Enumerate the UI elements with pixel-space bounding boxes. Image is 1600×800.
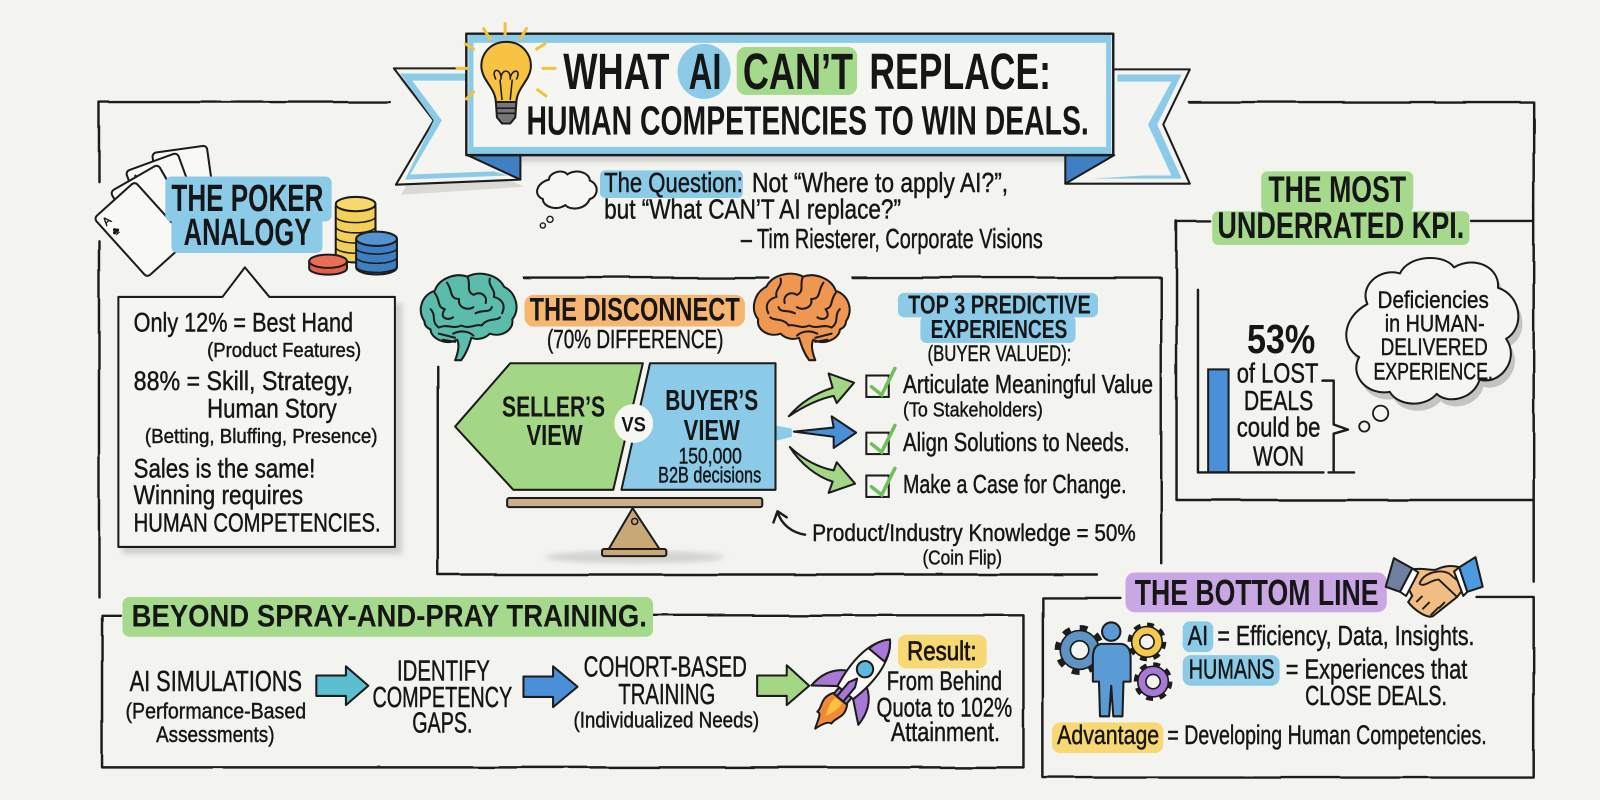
checklist item 1: (To Stakeholders) <box>903 399 1043 421</box>
step: ai simulations <box>126 666 306 747</box>
thought cloud: deficiencies: Deficiencies <box>1378 287 1489 314</box>
line: humans = experiences: HUMANS <box>1189 654 1274 685</box>
banner shadow <box>471 155 1114 161</box>
outer frame lines <box>99 102 1534 597</box>
callout box: poker stats: 88% = Skill, Strategy, <box>134 366 353 396</box>
arrow: green <box>757 665 809 705</box>
title text: CAN’T <box>743 43 853 100</box>
heading: top 3 predictive experiences: (BUYER VALUED): <box>928 341 1071 366</box>
callout box: poker stats: (Betting, Bluffing, Presence) <box>145 426 378 448</box>
arrow: green down <box>790 447 855 493</box>
icon: poker chips <box>309 197 397 275</box>
callout box: poker stats: Human Story <box>207 393 337 423</box>
line: humans = experiences: CLOSE DEALS. <box>1305 680 1447 711</box>
buyer's view panel: B2B decisions <box>658 463 761 488</box>
banner right tail <box>1065 69 1190 184</box>
stat: 53% of lost deals: WON <box>1253 440 1304 471</box>
brace <box>1322 381 1348 472</box>
banner main <box>466 34 1113 155</box>
icon: playing cards <box>94 145 218 278</box>
buyer's view panel: BUYER’S <box>665 385 758 417</box>
title text <box>527 43 1089 144</box>
result <box>877 635 1012 747</box>
icon: playing cards: A <box>131 172 143 186</box>
seller's view arrow: SELLER’S <box>502 391 605 423</box>
icon: playing cards: ♠ <box>159 170 166 183</box>
icon: playing cards: ♦ <box>136 185 145 199</box>
line: ai = efficiency: = Efficiency, Data, Insights. <box>1217 620 1474 651</box>
heading: the disconnect: (70% DIFFERENCE) <box>547 326 723 354</box>
heading: the disconnect <box>524 290 745 354</box>
step: cohort-based training: COHORT-BASED <box>584 652 747 684</box>
heading: most underrated kpi: THE MOST <box>1268 169 1407 210</box>
vs badge: VS <box>621 413 646 437</box>
thought cloud: deficiencies: in HUMAN- <box>1385 311 1485 338</box>
heading: the disconnect: THE DISCONNECT <box>530 290 740 327</box>
line: humans = experiences <box>1183 654 1468 711</box>
panel: the poker analogy <box>94 145 402 554</box>
icon: playing cards: ♣ <box>109 224 123 238</box>
arrow: green up <box>789 373 854 416</box>
step: identify competency gaps: GAPS. <box>412 708 472 740</box>
heading: top 3 predictive experiences: TOP 3 PREDICTIVE <box>908 291 1091 319</box>
checklist item 2: Align Solutions to Needs. <box>903 429 1130 457</box>
arrow: teal <box>316 666 368 705</box>
icon: playing cards: A <box>116 190 129 205</box>
callout box: poker stats: Winning requires <box>134 480 303 510</box>
icon: rocket <box>792 620 913 748</box>
step: cohort-based training <box>573 652 759 733</box>
thought cloud: deficiencies <box>1346 258 1522 432</box>
icon: playing cards: A <box>157 157 166 170</box>
title text: HUMAN COMPETENCIES TO WIN DEALS. <box>527 98 1089 144</box>
arrow: blue across <box>794 416 856 448</box>
checklist item 3 <box>866 468 1127 499</box>
stat: 53% of lost deals: DEALS <box>1244 385 1313 416</box>
seller's view arrow: VIEW <box>527 420 583 452</box>
checklist item 1 <box>866 368 1153 421</box>
icon: teal brain <box>421 274 516 360</box>
icon: person with gears <box>1059 622 1168 716</box>
callout box: poker stats <box>118 267 402 554</box>
highlight: The Question <box>600 170 743 198</box>
heading: most underrated kpi <box>1212 169 1469 246</box>
line: ai = efficiency: AI <box>1188 620 1208 651</box>
thought cloud: deficiencies: DELIVERED <box>1381 334 1488 361</box>
line: humans = experiences: = Experiences that <box>1286 654 1468 685</box>
thought cloud: question <box>537 172 597 228</box>
step: identify competency gaps: COMPETENCY <box>372 682 512 714</box>
title text: AI <box>689 43 721 100</box>
callout box: poker stats: HUMAN COMPETENCIES. <box>134 510 381 538</box>
heading: top 3 predictive experiences <box>898 291 1098 366</box>
step: identify competency gaps: IDENTIFY <box>397 656 490 688</box>
icon: handshake <box>1386 557 1483 617</box>
annotation: coin flip: (Coin Flip) <box>922 547 1002 569</box>
step: ai simulations: Assessments) <box>156 722 274 747</box>
panel: beyond spray-and-pray training <box>102 597 1023 767</box>
title text: WHAT <box>563 43 669 100</box>
icon: playing cards: ♥ <box>123 202 135 216</box>
the question quote: – Tim Riesterer, Corporate Visions <box>741 223 1043 254</box>
heading: the poker analogy: ANALOGY <box>184 211 311 253</box>
step: cohort-based training: TRAINING <box>618 679 715 711</box>
icon: balance scale <box>507 498 762 563</box>
icon: playing cards: A <box>100 214 114 228</box>
buyer's view panel: VIEW <box>684 415 740 447</box>
checklist item 1: Articulate Meaningful Value <box>903 371 1153 399</box>
heading: the poker analogy <box>165 177 332 253</box>
checklist item 2 <box>866 426 1130 457</box>
arrow: blue <box>523 666 578 707</box>
vs badge <box>614 404 653 443</box>
callout box: poker stats: Sales is the same! <box>134 454 315 484</box>
stat: 53% of lost deals: 53% <box>1247 316 1315 362</box>
annotation: coin flip <box>773 511 1136 569</box>
title text: REPLACE: <box>869 43 1051 100</box>
line: ai = efficiency <box>1183 620 1474 652</box>
heading: the poker analogy: THE POKER <box>171 177 323 219</box>
bar chart: 53 percent <box>1198 290 1354 472</box>
stat: 53% of lost deals <box>1237 316 1320 471</box>
seller's view arrow <box>455 363 643 490</box>
result: From Behind <box>887 666 1002 696</box>
callout box: poker stats: (Product Features) <box>207 340 361 362</box>
annotation: coin flip: Product/Industry Knowledge = 50% <box>812 520 1136 547</box>
the question quote: but “What CAN’T AI replace?” <box>604 193 901 224</box>
banner left tail <box>394 68 523 195</box>
the question quote: The Question: <box>604 167 743 198</box>
buyer's view panel <box>621 363 792 490</box>
stat: 53% of lost deals: could be <box>1237 412 1320 443</box>
highlight: AI <box>678 44 731 99</box>
thought cloud: deficiencies: EXPERIENCE. <box>1373 359 1493 386</box>
step: ai simulations: (Performance-Based <box>126 698 306 723</box>
line: advantage: Advantage <box>1057 720 1159 750</box>
step: identify competency gaps <box>372 656 512 740</box>
panel: the disconnect <box>421 274 1161 574</box>
panel: the bottom line <box>1043 557 1534 778</box>
line: advantage: = Developing Human Competencies. <box>1167 720 1487 750</box>
icon: orange brain <box>754 274 850 360</box>
highlight: CAN'T <box>737 47 857 95</box>
callout box: poker stats: Only 12% = Best Hand <box>134 308 353 338</box>
stat: 53% of lost deals: of LOST <box>1237 358 1319 389</box>
icon: light bulb <box>457 23 555 123</box>
result: Result: <box>907 636 977 666</box>
line: advantage <box>1052 720 1487 753</box>
step: ai simulations: AI SIMULATIONS <box>130 666 302 698</box>
heading: most underrated kpi: UNDERRATED KPI. <box>1217 205 1464 246</box>
result: Quota to 102% <box>877 692 1012 722</box>
title banner <box>394 23 1190 195</box>
heading: the bottom line: THE BOTTOM LINE <box>1135 573 1379 613</box>
heading: top 3 predictive experiences: EXPERIENCES <box>931 316 1067 344</box>
the question quote: Not “Where to apply AI?”, <box>752 167 1008 198</box>
step: cohort-based training: (Individualized Needs) <box>573 708 759 733</box>
heading: beyond spray-and-pray training: BEYOND SPRAY-AND-PRAY TRAINING. <box>132 598 647 634</box>
buyer's view panel: 150,000 <box>679 443 742 468</box>
the question quote <box>600 167 1043 254</box>
checklist item 3: Make a Case for Change. <box>903 471 1127 499</box>
panel: most underrated kpi <box>1177 169 1534 500</box>
result: Attainment. <box>891 717 1000 747</box>
